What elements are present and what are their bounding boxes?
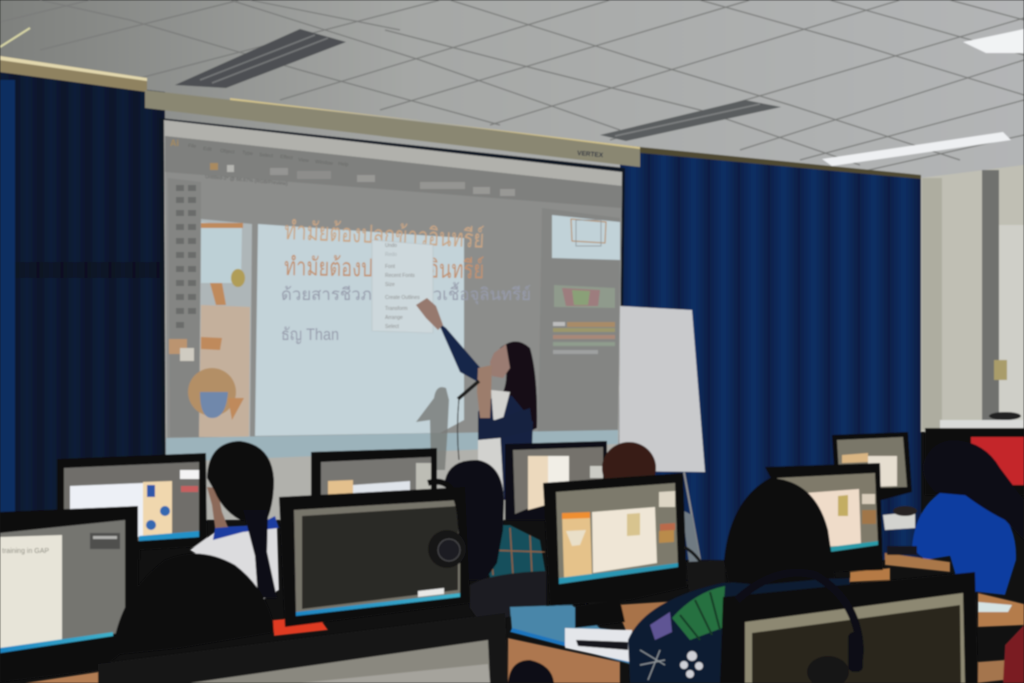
jacket lower sleeve bbox=[478, 408, 533, 440]
front left monitor: training in GAP bbox=[2, 548, 49, 555]
projector housing with brand: VERTEX bbox=[577, 150, 604, 159]
ceiling vent left bbox=[175, 29, 346, 88]
headphones on monitor bbox=[428, 482, 466, 568]
ceiling bbox=[0, 0, 1024, 180]
front left student head bbox=[112, 554, 275, 655]
ear and neck bbox=[207, 487, 228, 528]
ceiling vent center bbox=[600, 100, 781, 141]
student in floral top bbox=[628, 478, 850, 683]
selected heading on artboard: ทำมัยต้องปลูกข้าวอินทรีย์ bbox=[284, 217, 485, 255]
context menu: Select bbox=[385, 324, 400, 330]
context menu: Recent Fonts bbox=[385, 273, 415, 279]
far right red monitor bbox=[925, 428, 1024, 495]
main artboard bbox=[255, 224, 464, 436]
right center monitor bbox=[765, 463, 883, 572]
blue folder with phone and papers bbox=[510, 605, 632, 664]
front right monitor bbox=[720, 572, 978, 683]
left tools panel bbox=[168, 178, 201, 437]
hair bbox=[724, 478, 835, 585]
floral blouse bbox=[628, 578, 850, 683]
right wall bbox=[920, 165, 1024, 432]
monitor behind presenter right bbox=[505, 441, 607, 520]
teacher bbox=[416, 298, 537, 500]
menu bar: Edit bbox=[203, 146, 213, 153]
shadow on screen bbox=[416, 387, 449, 470]
projected application window bbox=[165, 136, 622, 457]
context menu: Size bbox=[385, 282, 395, 288]
front center monitor bbox=[98, 613, 508, 683]
center student chair bbox=[470, 571, 546, 622]
student in blue bbox=[912, 440, 1024, 595]
student behind center monitor bbox=[445, 460, 546, 580]
projector housing with brand bbox=[145, 90, 640, 167]
ceiling light strip bbox=[822, 132, 1011, 166]
subheading text: ด้วยสารชีวภาพจากหัวเชื้อจุลินทรีย์ bbox=[281, 282, 531, 305]
back left monitor bbox=[57, 453, 207, 560]
braid bbox=[243, 510, 277, 598]
context menu: Arrange bbox=[385, 315, 403, 321]
whiteboard bbox=[619, 306, 705, 560]
right side panels bbox=[538, 208, 620, 436]
large headphones bbox=[737, 573, 863, 683]
context menu: Font bbox=[385, 264, 396, 270]
menu bar: Effect bbox=[280, 154, 294, 161]
heading text: ทำมัยต้องปลูกข้าวอินทรีย์ bbox=[284, 253, 484, 285]
patterned teal shirt bbox=[478, 525, 546, 578]
right wood desk bbox=[978, 593, 1024, 683]
left artboard with poster bbox=[188, 219, 252, 437]
blue collar bbox=[213, 516, 279, 540]
projection screen bbox=[160, 118, 625, 520]
raised arm bbox=[438, 322, 484, 382]
menu bar: View bbox=[298, 157, 309, 164]
menu bar: File bbox=[188, 143, 197, 150]
hair bbox=[445, 460, 504, 580]
back right monitor bbox=[832, 432, 912, 500]
hair bbox=[492, 342, 537, 436]
right curtain bbox=[620, 150, 921, 560]
menu bar: Window bbox=[315, 159, 333, 167]
menu bar: Help bbox=[338, 161, 349, 168]
face bbox=[490, 344, 510, 378]
white uniform bbox=[190, 522, 279, 600]
red cloth bbox=[273, 616, 328, 636]
hand and forearm with microphone bbox=[477, 365, 492, 418]
white shirt bbox=[478, 390, 510, 500]
head hair bbox=[207, 441, 274, 522]
context menu: Redo bbox=[385, 252, 397, 258]
hand pointing bbox=[416, 298, 443, 330]
front chair bbox=[508, 660, 554, 683]
menu bar: Object bbox=[220, 148, 235, 156]
chair behind floral student bbox=[686, 560, 725, 600]
wood desk center bbox=[508, 598, 725, 683]
ceiling light top right bbox=[963, 29, 1024, 53]
menu bar: Ai bbox=[170, 138, 179, 148]
right desk items bbox=[850, 506, 950, 582]
menu bar: Select bbox=[259, 152, 274, 160]
context menu bbox=[372, 240, 433, 333]
menu bar: Untitled-3* @ 66.67% (RGB/Preview) bbox=[205, 174, 288, 187]
back center monitor bbox=[311, 448, 437, 497]
patterned shoulder behind monitor bbox=[682, 510, 702, 570]
projected taskbar bbox=[166, 430, 618, 462]
context menu: Undo bbox=[385, 243, 397, 249]
microphone on headset bbox=[684, 547, 710, 580]
front left monitor bbox=[0, 506, 138, 682]
hair bbox=[923, 440, 1024, 540]
menu bar bbox=[170, 138, 515, 196]
microphone cable bbox=[458, 398, 459, 460]
body and jacket bbox=[478, 395, 533, 500]
center front monitor bbox=[279, 487, 470, 627]
student with braid bbox=[190, 441, 279, 600]
context menu: Create Outlines bbox=[385, 295, 420, 301]
menu bar: Type bbox=[242, 150, 253, 157]
near left desk bbox=[25, 672, 98, 683]
student with brown hair bbox=[602, 442, 656, 494]
center right monitor bbox=[543, 473, 687, 628]
name text: ธัญ Than bbox=[281, 325, 339, 344]
context menu: Transform bbox=[385, 306, 408, 312]
left curtain bbox=[0, 72, 165, 520]
curtain rail trim bbox=[0, 56, 921, 179]
